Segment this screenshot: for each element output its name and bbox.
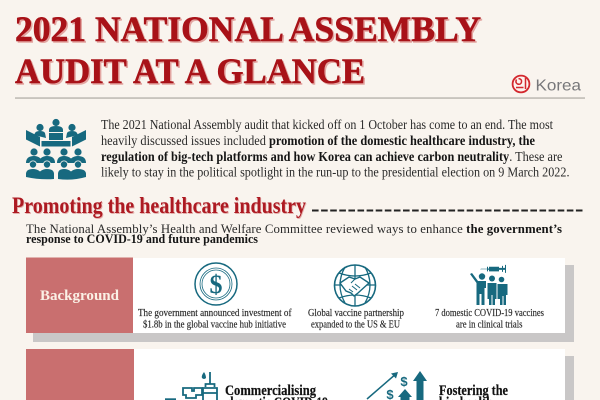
panel label: background bbox=[26, 258, 133, 333]
intro paragraph bbox=[101, 118, 570, 180]
icon: people with vaccine bbox=[470, 265, 508, 305]
caption: vaccines: are in clinical trials bbox=[456, 320, 522, 330]
intro paragraph: regulation of big-tech platforms and how Korea can achieve carbon neutrality. These are bbox=[101, 150, 562, 165]
icon: assembly seating bbox=[26, 119, 86, 180]
title: 2021 NATIONAL ASSEMBLY bbox=[16, 10, 482, 50]
heading: promoting the healthcare industry: Promoting the healthcare industry bbox=[12, 193, 306, 218]
point: fostering: Fostering the bbox=[439, 383, 508, 399]
caption: partnership: Global vaccine partnership bbox=[308, 308, 404, 319]
heading: promoting the healthcare industry bbox=[12, 193, 584, 219]
caption: investment: The government announced investment of bbox=[138, 308, 292, 319]
title: AUDIT AT A GLANCE bbox=[16, 52, 366, 92]
panel: background bbox=[26, 258, 574, 342]
icon: dollar coin bbox=[195, 263, 237, 305]
caption: investment bbox=[138, 308, 292, 330]
title bbox=[15, 9, 482, 92]
panel label: background: Background bbox=[40, 288, 119, 304]
title: 2021 NATIONAL ASSEMBLY bbox=[15, 9, 481, 49]
caption: investment: $1.8b in the global vaccine hub initiative bbox=[143, 320, 286, 330]
caption: vaccines bbox=[435, 308, 544, 330]
logo: 21 Korea bbox=[513, 76, 581, 94]
point: commercialising: Commercialising bbox=[225, 383, 316, 399]
caption: partnership bbox=[308, 308, 404, 330]
heading: promoting the healthcare industry: Promoting the healthcare industry bbox=[13, 194, 307, 219]
icon: globe handshake bbox=[334, 265, 376, 306]
caption: partnership: expanded to the US & EU bbox=[311, 320, 400, 330]
icon: growth arrows bbox=[367, 371, 427, 400]
section description: response to COVID-19 and future pandemics bbox=[26, 232, 258, 246]
title: AUDIT AT A GLANCE bbox=[15, 51, 365, 91]
caption: vaccines: 7 domestic COVID-19 vaccines bbox=[435, 308, 544, 319]
intro paragraph: heavily discussed issues included promotion of the domestic healthcare industry, the bbox=[101, 134, 535, 149]
section description bbox=[26, 222, 562, 246]
panel label block bbox=[26, 349, 134, 400]
icon: dollar coin: $ bbox=[210, 270, 222, 299]
section description: The National Assembly’s Health and Welfare Committee reviewed ways to enhance the government’s bbox=[26, 222, 562, 236]
icon: growth arrows: $ bbox=[400, 374, 408, 389]
logo: 21 Korea: Korea bbox=[536, 78, 581, 94]
icon: vaccine production bbox=[165, 372, 217, 400]
panel: policy proposals bbox=[26, 349, 574, 400]
